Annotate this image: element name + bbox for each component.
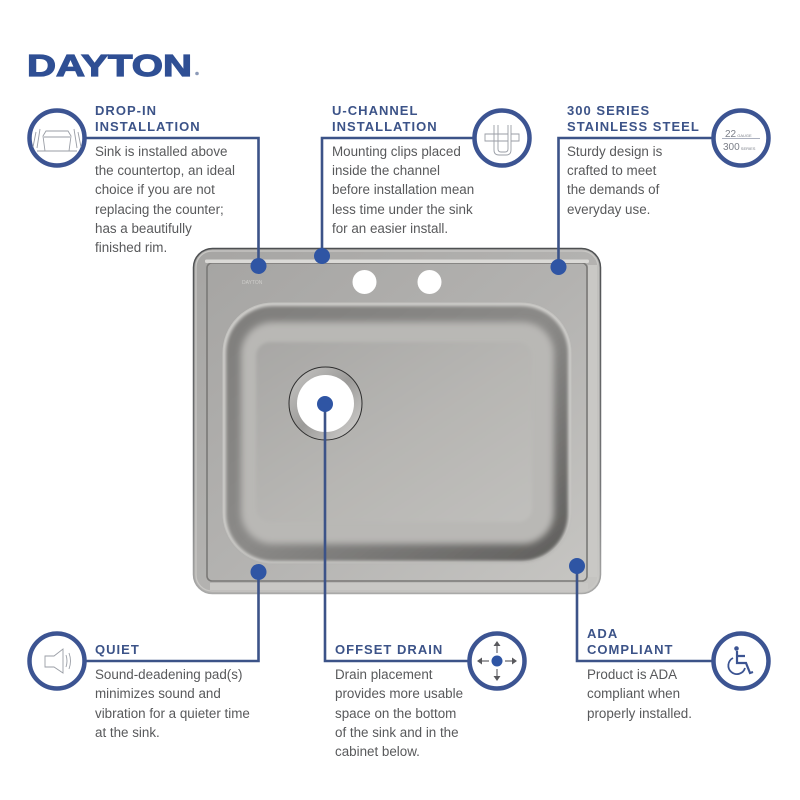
connector line bbox=[577, 566, 716, 661]
marker dot bbox=[317, 396, 333, 412]
heading: OFFSET DRAIN bbox=[335, 642, 443, 657]
body text: everyday use. bbox=[567, 202, 650, 217]
body text: finished rim. bbox=[95, 240, 167, 255]
sink product image bbox=[194, 248, 600, 594]
heading: INSTALLATION bbox=[332, 119, 438, 134]
body text: choice if you are not bbox=[95, 182, 215, 197]
heading: STAINLESS STEEL bbox=[567, 119, 700, 134]
heading: INSTALLATION bbox=[95, 119, 201, 134]
body text: cabinet below. bbox=[335, 744, 420, 759]
body text: of the sink and in the bbox=[335, 725, 459, 740]
marker dot bbox=[250, 258, 266, 274]
body text: at the sink. bbox=[95, 725, 160, 740]
callout: u-channel installation bbox=[314, 103, 530, 264]
body text: Sturdy design is bbox=[567, 144, 663, 159]
heading: 300 SERIES bbox=[567, 103, 650, 118]
icon: drain arrows bbox=[470, 634, 524, 688]
marker dot bbox=[569, 558, 585, 574]
body text: Mounting clips placed bbox=[332, 144, 461, 159]
body text: vibration for a quieter time bbox=[95, 706, 250, 721]
body text: Drain placement bbox=[335, 667, 433, 682]
body text: minimizes sound and bbox=[95, 686, 221, 701]
body text: before installation mean bbox=[332, 182, 474, 197]
body text: provides more usable bbox=[335, 686, 463, 701]
connector line bbox=[322, 138, 478, 256]
heading: ADA bbox=[587, 626, 618, 641]
heading: COMPLIANT bbox=[587, 642, 673, 657]
body text: the countertop, an ideal bbox=[95, 163, 235, 178]
icon: 22 gauge 300 series: 22 GAUGE bbox=[725, 129, 752, 140]
marker dot bbox=[550, 259, 566, 275]
body text: Sink is installed above bbox=[95, 144, 228, 159]
body text: has a beautifully bbox=[95, 221, 192, 236]
callout: ada compliant bbox=[569, 558, 768, 721]
body text: space on the bottom bbox=[335, 706, 456, 721]
icon: speaker bbox=[30, 634, 84, 688]
connector line bbox=[84, 138, 258, 266]
faucet holes bbox=[352, 270, 442, 294]
icon: 22 gauge 300 series bbox=[714, 110, 768, 166]
body text: the demands of bbox=[567, 182, 660, 197]
heading: DROP-IN bbox=[95, 103, 157, 118]
connector line bbox=[558, 138, 715, 267]
icon: u-channel clip bbox=[474, 110, 530, 166]
logo: Dayton: DAYTON bbox=[27, 48, 192, 83]
body text: less time under the sink bbox=[332, 202, 473, 217]
body text: properly installed. bbox=[587, 706, 692, 721]
icon: wheelchair bbox=[714, 634, 768, 688]
marker dot bbox=[314, 248, 330, 264]
connector line bbox=[84, 572, 258, 661]
body text: compliant when bbox=[587, 686, 680, 701]
heading: QUIET bbox=[95, 642, 140, 657]
marker dot bbox=[250, 564, 266, 580]
sink basin bbox=[223, 303, 571, 563]
heading: U-CHANNEL bbox=[332, 103, 418, 118]
callout: offset drain bbox=[317, 396, 524, 759]
body text: Sound-deadening pad(s) bbox=[95, 667, 242, 682]
connector line bbox=[325, 404, 470, 661]
callout: quiet bbox=[30, 564, 266, 740]
icon: 22 gauge 300 series: 300 SERIES bbox=[723, 142, 756, 153]
small engraved logo: DAYTON bbox=[242, 280, 263, 286]
icon: drop-in sink bbox=[30, 110, 84, 166]
body text: Product is ADA bbox=[587, 667, 677, 682]
body text: replacing the counter; bbox=[95, 202, 224, 217]
body text: for an easier install. bbox=[332, 221, 448, 236]
callout: drop-in installation bbox=[30, 103, 266, 274]
drain opening bbox=[289, 367, 362, 440]
body text: inside the channel bbox=[332, 163, 440, 178]
body text: crafted to meet bbox=[567, 163, 657, 178]
callout: 300 series stainless steel bbox=[550, 103, 768, 275]
